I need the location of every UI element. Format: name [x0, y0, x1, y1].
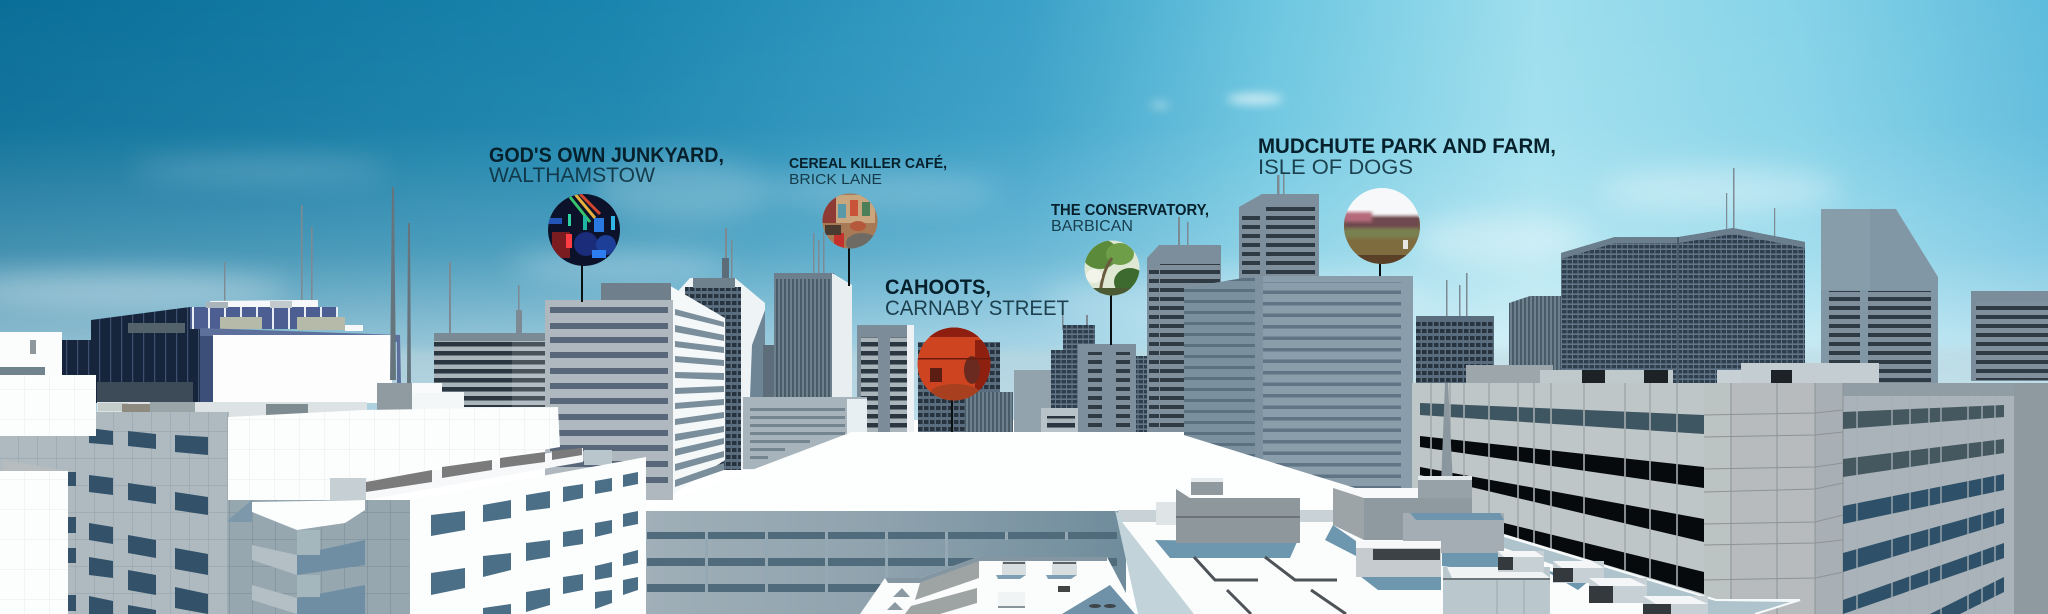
roof units on right building [1466, 363, 1879, 383]
label: God's Own Junkyard: WALTHAMSTOW [489, 164, 655, 187]
label: The Conservatory [1051, 202, 1209, 235]
upper white wall [228, 407, 560, 502]
top tower behind big block [1239, 194, 1319, 285]
right wall windows [431, 472, 638, 614]
distant towers: right [1416, 209, 2048, 385]
octagonal dark tower [1561, 228, 1805, 385]
small roof units [1498, 551, 1708, 614]
pin: Cereal Killer Cafe [822, 193, 878, 286]
antenna in front [1441, 383, 1453, 485]
small dark tower [1416, 316, 1494, 384]
towers behind cahoots [918, 342, 1052, 432]
window strips, front face [1420, 403, 1704, 594]
sky background [0, 0, 2048, 420]
angular tower [1821, 209, 1938, 385]
photo: tropical plants [1084, 240, 1140, 296]
label: The Conservatory: THE CONSERVATORY, [1051, 202, 1209, 219]
box C [1356, 541, 1441, 577]
box B [1333, 476, 1504, 553]
narrow tower [1509, 296, 1561, 375]
middle recessed section [228, 500, 410, 614]
antennas [224, 168, 1775, 335]
wall panel lines [1431, 383, 1677, 600]
carnaby tower [857, 325, 914, 433]
label: Mudchute Park and Farm [1258, 134, 1556, 179]
big grey block [1184, 276, 1413, 500]
label: Cahoots: CAHOOTS, [885, 276, 991, 299]
box D [1443, 567, 1550, 614]
barbican tower [1041, 325, 1148, 432]
tall antennas in front of navy block [390, 187, 411, 383]
photo: field with llama [1344, 188, 1420, 265]
pin: The Conservatory [1084, 240, 1140, 345]
label: Cereal Killer Cafe: BRICK LANE [789, 171, 882, 188]
photo: cafe shelves [822, 193, 878, 253]
pin: God's Own Junkyard [548, 194, 620, 302]
pin: Cahoots [917, 327, 991, 432]
photo: red interior [917, 327, 991, 401]
label: Mudchute Park and Farm: MUDCHUTE PARK AND FARM, [1258, 134, 1556, 158]
navy office block [12, 300, 401, 403]
roof skylight lines [1194, 557, 1346, 614]
rooftop parts behind white wall [97, 383, 464, 417]
box A [1156, 478, 1300, 543]
central white roof and facade [646, 432, 1355, 614]
pin: Mudchute Park and Farm [1344, 188, 1420, 276]
tower behind main block [679, 278, 765, 470]
label: Cahoots: CARNABY STREET [885, 297, 1069, 320]
left face windows [68, 428, 208, 614]
foreground low roof [860, 557, 1137, 614]
photo: neon lights [548, 194, 620, 266]
main white and grey tower [545, 283, 725, 500]
label: Cereal Killer Cafe: CEREAL KILLER CAFÉ, [789, 155, 947, 172]
left mid towers [12, 187, 867, 500]
window strips, side face [1843, 405, 2004, 614]
label: Cereal Killer Cafe [789, 155, 947, 188]
label: Cahoots [885, 276, 1069, 320]
dark tall tower [763, 273, 852, 405]
striped tower [1147, 245, 1221, 432]
right foreground building [1412, 363, 2048, 614]
label: God's Own Junkyard [489, 144, 724, 187]
distant towers: centre [679, 194, 1413, 500]
left foreground building [0, 332, 646, 614]
foreground roof with rooftop units [1115, 476, 1800, 614]
lower white wall [410, 457, 646, 614]
striped mid block [434, 333, 546, 410]
label: The Conservatory: BARBICAN [1051, 218, 1133, 235]
low block in front of dark tower [743, 397, 867, 469]
white corner panels [0, 332, 96, 614]
label: God's Own Junkyard: GOD'S OWN JUNKYARD, [489, 144, 724, 167]
left grey face [0, 412, 229, 614]
roof shadows [1155, 525, 1590, 590]
far right tower [1971, 291, 2048, 381]
white box on navy block [213, 335, 392, 403]
label: Mudchute Park and Farm: ISLE OF DOGS [1258, 155, 1413, 179]
louvre ledge [330, 448, 612, 502]
